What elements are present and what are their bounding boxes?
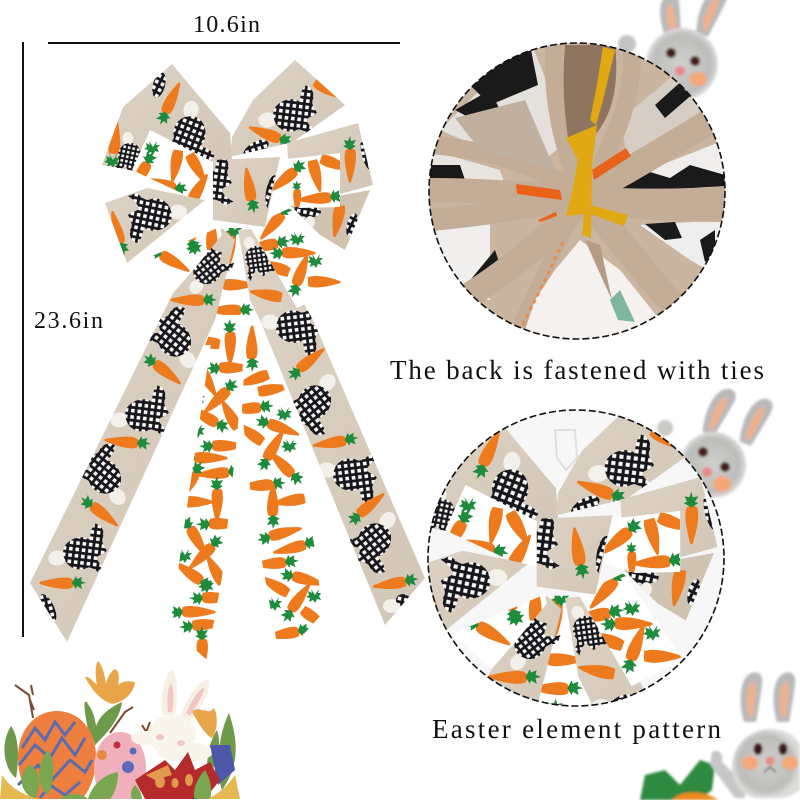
orange egg [18, 711, 96, 799]
blue egg back [210, 745, 235, 785]
checkered ribbon upper left [442, 50, 557, 156]
width label: 10.6in [193, 12, 260, 38]
white bunny [131, 670, 213, 762]
easter eggs illustration [0, 661, 240, 799]
caption: pattern: Easter element pattern [432, 714, 722, 744]
width dimension line [48, 42, 400, 44]
detail circle: bow front [428, 416, 718, 706]
grey bunny [710, 672, 800, 798]
grass leaves back [4, 702, 236, 790]
right linen tail [238, 228, 425, 625]
linen panel upper left [455, 100, 555, 170]
gold foil tie [566, 47, 628, 238]
bow loops and knot [102, 60, 374, 308]
bunny and carrot bottom right [640, 672, 800, 800]
orange stripes [516, 148, 631, 222]
tulip right [192, 708, 217, 738]
white ribbon back [526, 240, 656, 339]
wall hook [555, 430, 577, 470]
egg dots and cracks [146, 765, 193, 788]
main bow [30, 60, 425, 673]
bunny middle right [657, 384, 775, 498]
foreground leaves [22, 750, 211, 799]
carrot with leaves [640, 760, 718, 800]
checkered ribbon right [622, 77, 725, 268]
height label: 23.6in [34, 308, 103, 334]
dashed ring: top circle [429, 43, 725, 339]
dashed ring: bottom circle [428, 410, 724, 706]
red cracked egg [135, 752, 220, 799]
left linen tail [30, 228, 235, 642]
height dimension line [22, 42, 24, 637]
tan strands [430, 45, 725, 325]
tulip left [85, 661, 135, 755]
detail circle: back of bow [429, 40, 730, 345]
enlarged bow [428, 416, 718, 706]
centre white tails [172, 228, 321, 660]
bunny top right [618, 0, 729, 100]
caption: back: The back is fastened with ties [390, 355, 764, 385]
basket [0, 775, 240, 799]
white ribbon lower left [435, 224, 498, 300]
twigs [15, 685, 150, 735]
checkered ribbon left [430, 154, 504, 180]
inner brown fold [564, 45, 616, 138]
pink egg [94, 732, 146, 799]
